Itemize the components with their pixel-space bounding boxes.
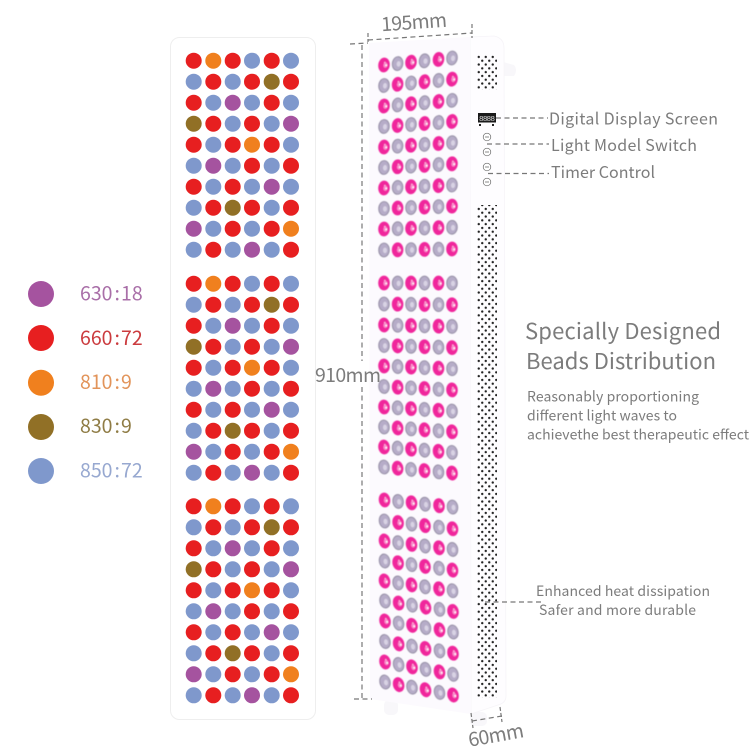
legend item: 830 <box>28 410 132 440</box>
panel: beads distribution map <box>170 38 316 720</box>
legend item: 810: : <box>114 366 120 395</box>
callout: light model switch: Light Model Switch <box>551 132 697 156</box>
legend item: 850: 850 <box>80 454 112 484</box>
device side face <box>470 36 506 714</box>
LED block 1 <box>378 50 458 257</box>
legend item: 660: 660 <box>80 322 112 351</box>
legend item: 660: 72 <box>121 322 143 351</box>
legend item: 850: : <box>114 454 120 484</box>
callout: heat dissipation <box>485 581 710 620</box>
legend item: 630: 18 <box>121 278 143 306</box>
heading: specially designed beads distribution: Beads Distribution <box>526 344 716 376</box>
long side vent <box>477 205 497 698</box>
legend item: 810 <box>28 366 132 396</box>
device: LED light therapy panel <box>369 36 516 726</box>
legend item: 850: 72 <box>121 454 143 484</box>
heading: specially designed beads distribution <box>525 314 721 376</box>
bead group: bottom <box>186 498 299 703</box>
digital display <box>478 113 496 126</box>
legend item: 830: : <box>114 410 120 439</box>
legend item: 630: : <box>114 278 120 306</box>
callout: heat dissipation: Enhanced heat dissipation <box>536 581 710 601</box>
text block: description: achievethe best therapeutic effect <box>527 424 750 444</box>
text block: description: different light waves to <box>527 406 677 426</box>
LED rows <box>378 50 459 703</box>
text block: description <box>527 386 750 444</box>
control buttons <box>483 133 491 186</box>
dimension: 195mm width <box>368 4 472 42</box>
legend item: 630 <box>28 278 143 307</box>
dimension: 910mm height: 910mm <box>315 359 381 388</box>
legend item: 630: 630 <box>80 278 112 306</box>
legend item: 660: : <box>114 322 120 351</box>
top vent <box>477 55 497 90</box>
dimension: 195mm width: 195mm <box>380 4 448 37</box>
text block: description: Reasonably proportioning <box>527 386 699 406</box>
device front face <box>369 37 471 714</box>
legend: wavelength counts <box>28 278 143 484</box>
legend item: 660 <box>28 322 143 351</box>
legend item: 830: 9 <box>121 410 132 439</box>
legend item: 810: 9 <box>121 366 132 395</box>
legend item: 830: 830 <box>80 410 112 439</box>
digital display: 8888 <box>479 116 495 124</box>
legend item: 810: 810 <box>80 366 112 395</box>
callout: digital display screen: Digital Display Screen <box>549 106 718 130</box>
dimension: 60mm depth: 60mm <box>466 714 526 753</box>
callout: timer control: Timer Control <box>551 159 655 183</box>
dimension: 910mm height <box>315 43 381 699</box>
LED block 3 <box>379 492 459 703</box>
bead group: middle <box>186 276 299 481</box>
device feet and mounts <box>384 62 516 726</box>
LED block 2 <box>378 276 458 481</box>
callout: heat dissipation: Safer and more durable <box>539 600 696 620</box>
heading: specially designed beads distribution: Specially Designed <box>525 314 721 346</box>
legend item: 850 <box>28 454 143 484</box>
bead group: top <box>186 53 299 258</box>
